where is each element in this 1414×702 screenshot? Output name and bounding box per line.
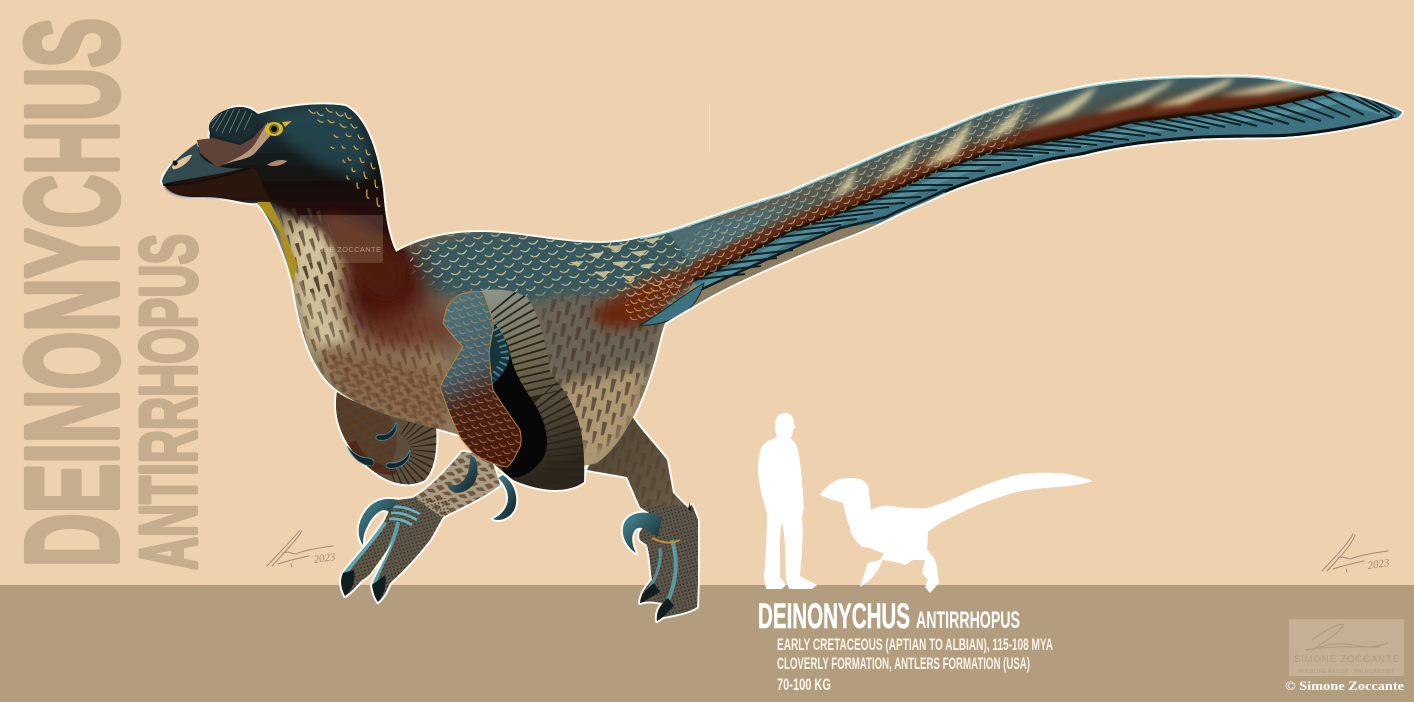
feather fan stripes (505, 300, 567, 488)
throat yellow stripe (257, 202, 297, 285)
dinosaur illustration (150, 60, 1410, 625)
head crest tuft (209, 107, 258, 142)
scale silhouette: Deinonychus (820, 473, 1093, 593)
near sickle claw (359, 499, 398, 545)
near running leg and foot (335, 448, 500, 608)
hand claws (447, 456, 516, 520)
white outline halo (162, 76, 1402, 621)
teal tail feather band (694, 92, 1410, 290)
tail rust band (640, 90, 1340, 325)
nostril (171, 154, 193, 170)
brown facial patch (197, 123, 268, 167)
teal inner feathers (490, 324, 510, 384)
signature right (1322, 534, 1391, 572)
tail underside (660, 212, 886, 330)
pelvic teal feather (640, 283, 704, 325)
pale tail stripes (829, 76, 1308, 201)
back scales (410, 222, 708, 306)
far sickle claw (623, 513, 662, 553)
watermark on neck: SIMONE ZOCCANTE (303, 245, 381, 254)
tail top rim (640, 76, 1340, 238)
neck flecks (277, 208, 345, 300)
chest flecks (282, 219, 448, 428)
caption: facts (777, 635, 1053, 694)
eye (265, 121, 292, 136)
tail dark seam (694, 91, 1338, 281)
chest cream centre (285, 225, 350, 350)
rust hip (590, 270, 690, 328)
pale back feather tips (570, 237, 660, 282)
watermark logo (1289, 619, 1404, 676)
near wing (470, 289, 584, 490)
lower chest hatch (320, 345, 450, 435)
chest tan base (278, 215, 450, 435)
back teal (405, 205, 720, 305)
hind grey region (536, 306, 663, 390)
signature left: 2023 (313, 551, 337, 566)
caption: facts: EARLY CRETACEOUS (APTIAN TO ALBIAN), 115-108 MYA (777, 635, 1053, 654)
rust nape (320, 214, 401, 296)
caption: facts: 70-100 KG (777, 675, 831, 694)
rust shoulder (343, 242, 427, 338)
far hand claws (347, 423, 410, 468)
signature left (267, 530, 337, 567)
far arm with folded feathers (336, 392, 436, 485)
head scales (309, 108, 380, 206)
tan stripe behind eye (222, 122, 270, 165)
scale silhouette: human (758, 413, 817, 589)
caption: species name: ANTIRRHOPUS (916, 607, 1020, 634)
snout teal (162, 143, 245, 184)
tail scale crescents (640, 99, 1042, 318)
far leg and foot (587, 415, 705, 625)
neck and head (162, 104, 406, 264)
mouth line (163, 168, 250, 185)
black inner feather band (492, 322, 547, 478)
tail mid shading (738, 84, 1324, 242)
signature right: 2023 (1367, 557, 1391, 572)
main body, head and tail (150, 60, 1410, 480)
faint vertical artifact (709, 104, 710, 152)
belly fill (555, 365, 650, 470)
ground band (0, 585, 1414, 702)
orange scale flecks on hip (625, 278, 680, 320)
caption: species name: DEINONYCHUS (758, 597, 910, 636)
near arm with scales (440, 291, 521, 467)
watermark logo: SIMONE ZOCCANTE (1294, 654, 1399, 665)
caption: facts: CLOVERLY FORMATION, ANTLERS FORMATION (USA) (777, 654, 1030, 673)
ear slit (267, 160, 287, 166)
head teal top sheen (262, 106, 372, 180)
tail upper (663, 84, 1402, 310)
copyright: © Simone Zoccante (1285, 679, 1405, 693)
watermark on neck (300, 215, 383, 263)
lower jaw (164, 167, 270, 200)
watermark logo: WILDLIFE ARTIST · PALEOARTIST (1299, 669, 1395, 675)
